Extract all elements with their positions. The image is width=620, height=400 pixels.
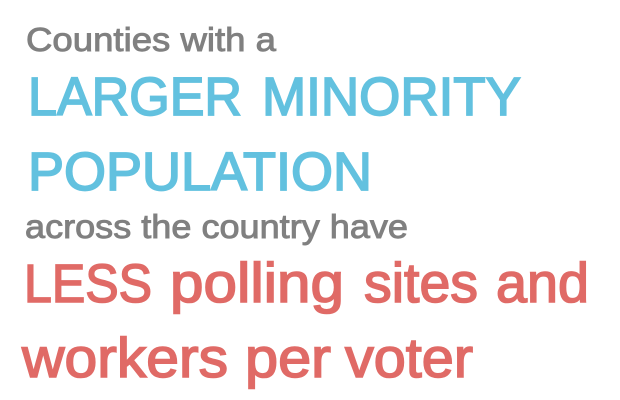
red headline: polling [170,251,344,314]
connecting text: across the country have [25,208,408,245]
red headline: and [496,251,589,314]
red headline: LESS [24,254,152,314]
blue headline: POPULATION [28,142,372,202]
red headline: sites [364,251,478,314]
red headline: voter [345,326,473,389]
red headline: workers [21,326,228,389]
blue headline: MINORITY [262,67,521,127]
intro text: Counties with a [26,21,277,58]
blue headline: LARGER [28,67,242,127]
blue headline [28,67,521,202]
red headline [21,251,589,389]
red headline: per [245,326,331,389]
